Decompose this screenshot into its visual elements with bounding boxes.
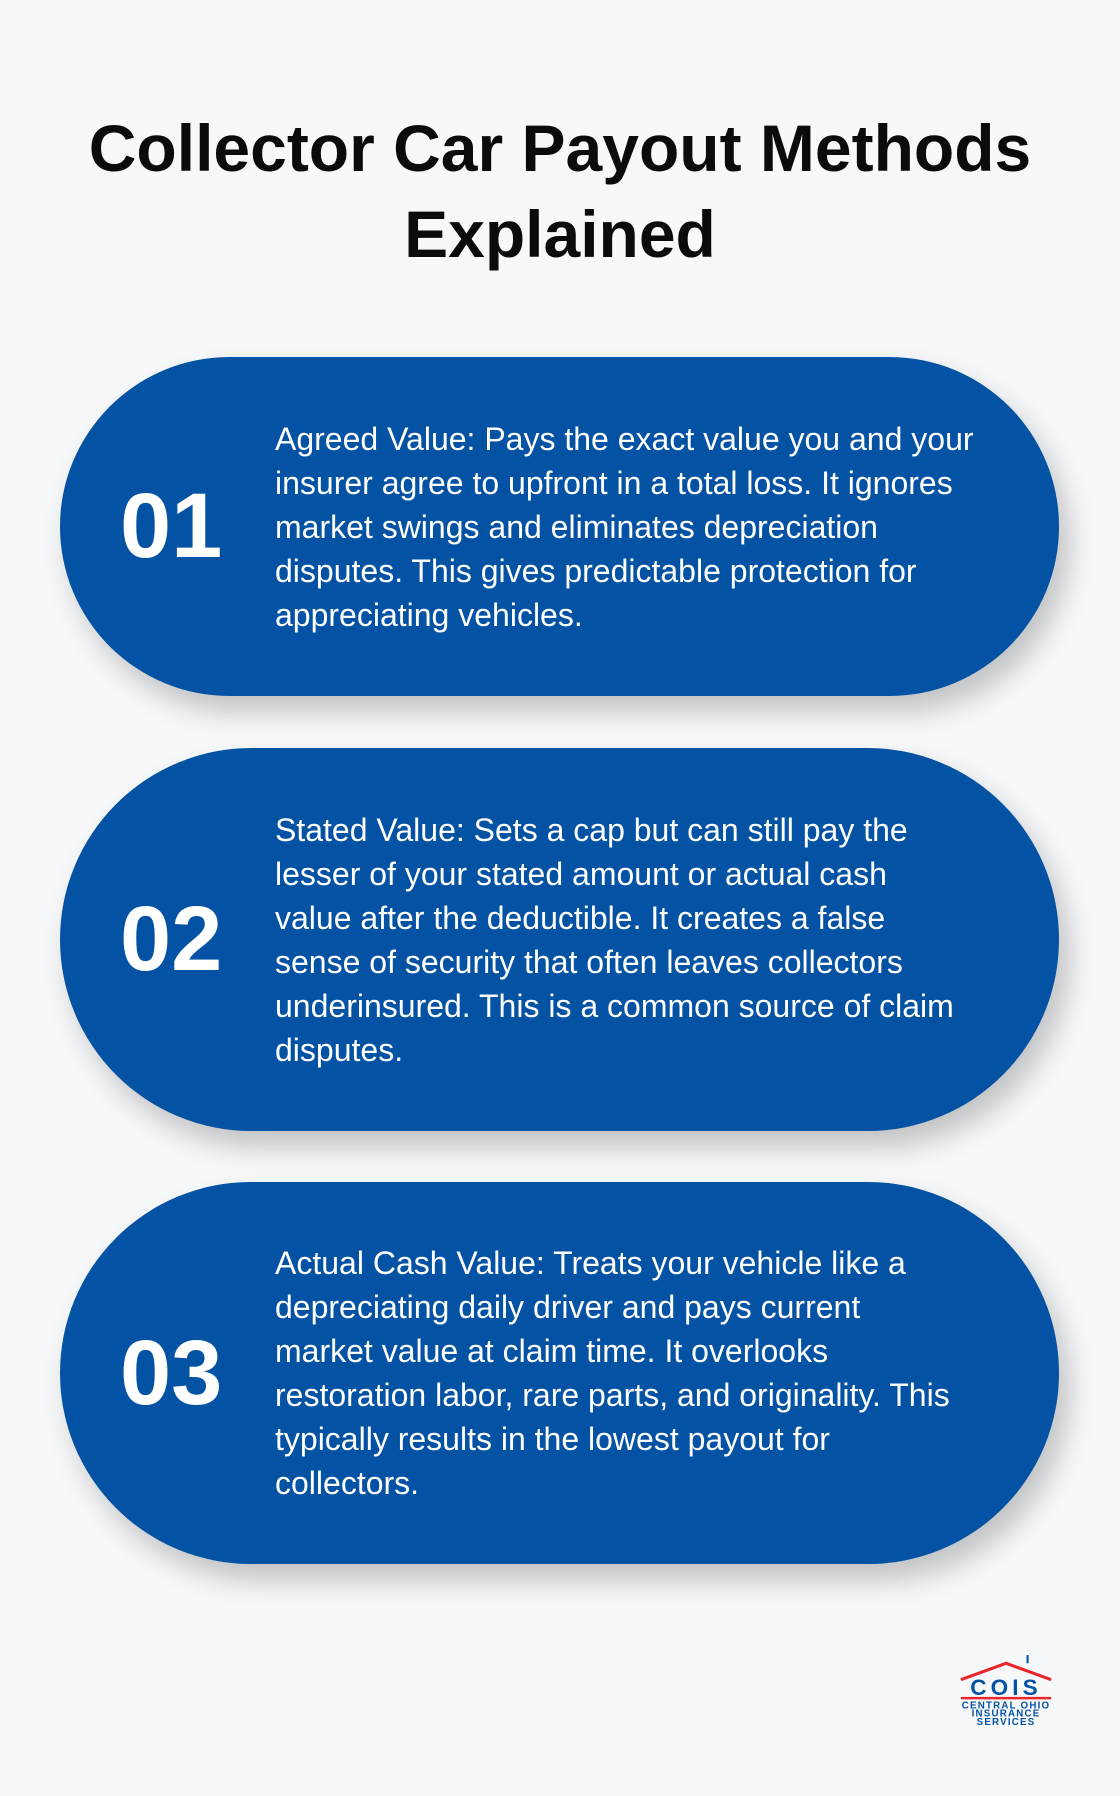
- text: actual cash value: [275, 1245, 950, 1501]
- logo: COIS: SERVICES: [977, 1717, 1035, 1728]
- text: stated value: sense of security that often leaves collectors: [275, 944, 903, 980]
- text: agreed value: disputes. This gives predictable protection for: [275, 552, 917, 588]
- text: agreed value: market swings and eliminates depreciation: [275, 508, 878, 544]
- title: Collector Car Payout Methods: [89, 111, 1031, 185]
- text: actual cash value: collectors.: [275, 1465, 419, 1501]
- text: actual cash value: depreciating daily driver and pays current: [275, 1289, 860, 1325]
- panel: agreed value: [60, 357, 1059, 696]
- text: agreed value: [275, 420, 974, 632]
- text: agreed value: appreciating vehicles.: [275, 596, 583, 632]
- text: stated value: disputes.: [275, 1032, 403, 1068]
- text: actual cash value: restoration labor, rare parts, and originality. This: [275, 1377, 950, 1413]
- logo: COIS: INSURANCE: [972, 1709, 1040, 1720]
- text: agreed value: Agreed Value: Pays the exact value you and your: [275, 420, 974, 456]
- panel: actual cash value: [60, 1182, 1059, 1564]
- text: stated value: Stated Value: Sets a cap but can still pay the: [275, 812, 908, 848]
- logo: COIS: COIS: [970, 1675, 1042, 1700]
- text: actual cash value: typically results in the lowest payout for: [275, 1421, 830, 1457]
- logo: COIS: CENTRAL OHIO: [962, 1700, 1050, 1711]
- text: actual cash value: market value at claim time. It overlooks: [275, 1333, 828, 1369]
- title: [89, 111, 1031, 271]
- text: agreed value: insurer agree to upfront in a total loss. It ignores: [275, 464, 953, 500]
- title: Explained: [404, 197, 716, 271]
- text: stated value: lesser of your stated amount or actual cash: [275, 856, 887, 892]
- text: actual cash value: Actual Cash Value: Treats your vehicle like a: [275, 1245, 906, 1281]
- text: stated value: underinsured. This is a common source of claim: [275, 988, 954, 1024]
- text: stated value: value after the deductible. It creates a false: [275, 900, 885, 936]
- text: stated value: [275, 812, 954, 1068]
- number 03: 03: [120, 1322, 222, 1424]
- number 02: 02: [120, 888, 222, 990]
- logo: COIS: [960, 1655, 1052, 1728]
- number 01: 01: [120, 475, 222, 577]
- panel: stated value: [60, 748, 1059, 1131]
